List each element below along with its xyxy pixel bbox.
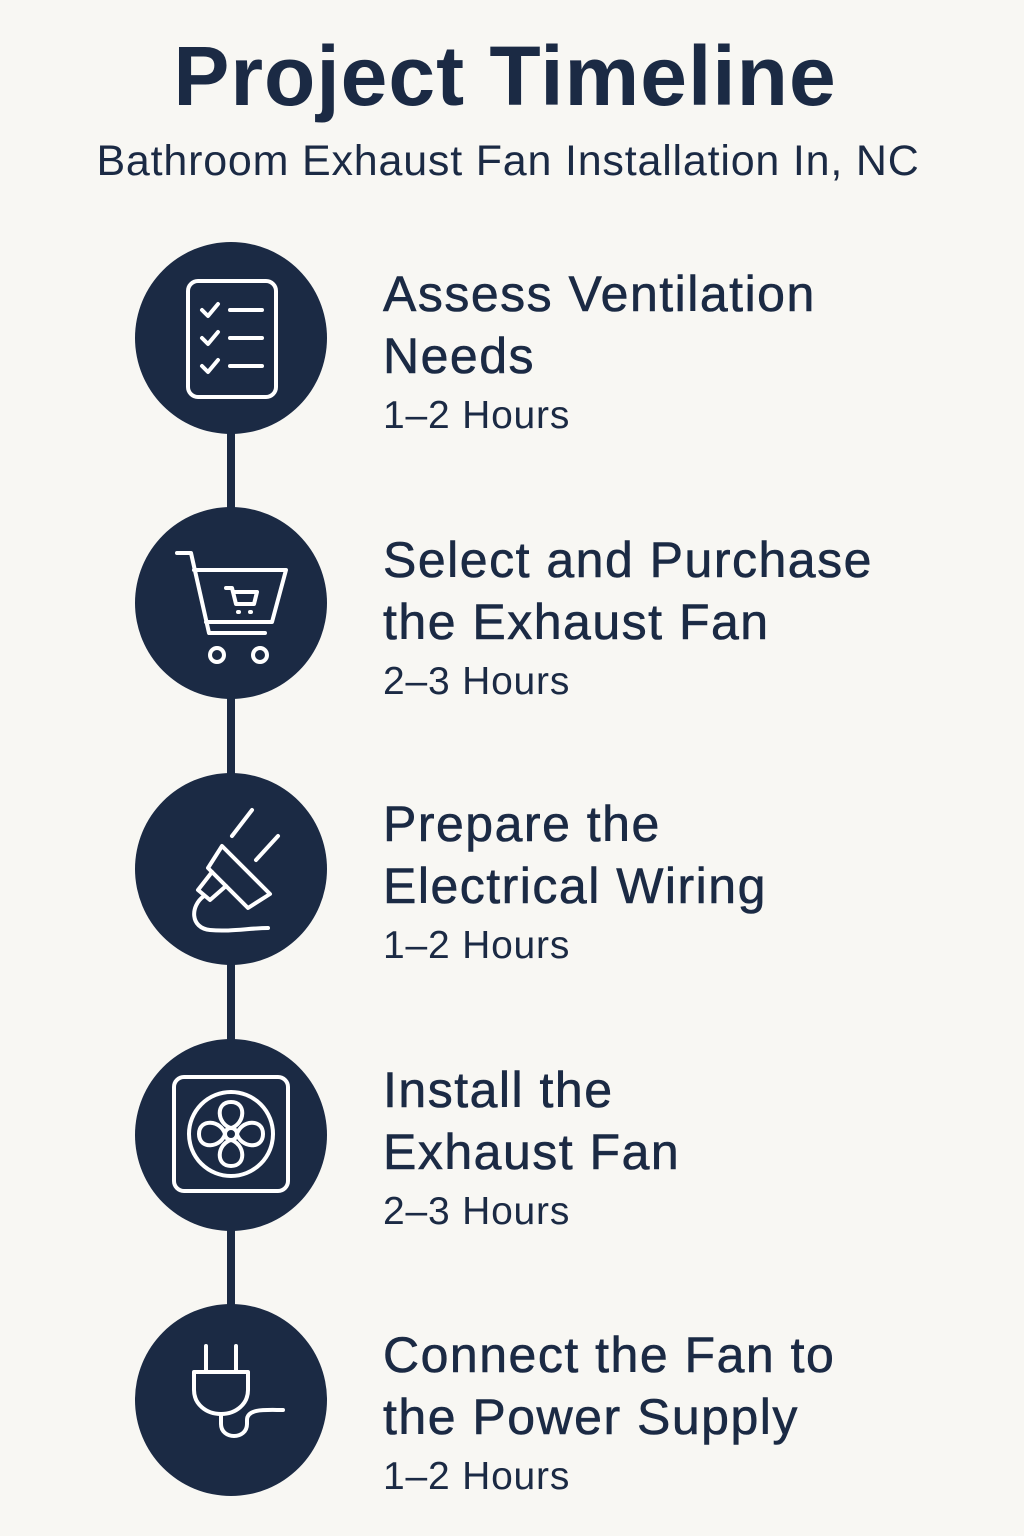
step 4 text: Install the bbox=[383, 1062, 614, 1118]
step 5 text bbox=[383, 1327, 835, 1498]
icon: checklist bbox=[135, 242, 327, 434]
title: Project Timeline bbox=[173, 29, 837, 123]
step 3 text: Prepare the bbox=[383, 796, 661, 852]
step 2 text: 2–3 Hours bbox=[383, 660, 570, 703]
step 1 text bbox=[382, 266, 816, 437]
step 3 text: 1–2 Hours bbox=[383, 924, 570, 967]
step 4 text bbox=[383, 1062, 680, 1233]
step 2 text: the Exhaust Fan bbox=[383, 594, 770, 650]
icon: fan bbox=[135, 1039, 327, 1231]
step 1 text: 1–2 Hours bbox=[383, 394, 570, 437]
step 1 text: Needs bbox=[383, 328, 535, 384]
step 4 text: Exhaust Fan bbox=[383, 1124, 680, 1180]
icon: cart bbox=[135, 507, 327, 699]
subtitle: Bathroom Exhaust Fan Installation In, NC bbox=[96, 137, 920, 185]
step 5 text: Connect the Fan to bbox=[383, 1327, 835, 1383]
icon: plug with cord bbox=[135, 773, 327, 965]
step 4 text: 2–3 Hours bbox=[383, 1190, 570, 1233]
step 3 text bbox=[383, 796, 767, 967]
step 2 text: Select and Purchase bbox=[383, 532, 873, 588]
step 2 text bbox=[383, 532, 873, 703]
step 3 text: Electrical Wiring bbox=[383, 858, 767, 914]
step 1 text: Assess Ventilation bbox=[383, 266, 816, 322]
icon: plug bbox=[135, 1304, 327, 1496]
step 5 text: the Power Supply bbox=[383, 1389, 799, 1445]
step 5 text: 1–2 Hours bbox=[383, 1455, 570, 1498]
